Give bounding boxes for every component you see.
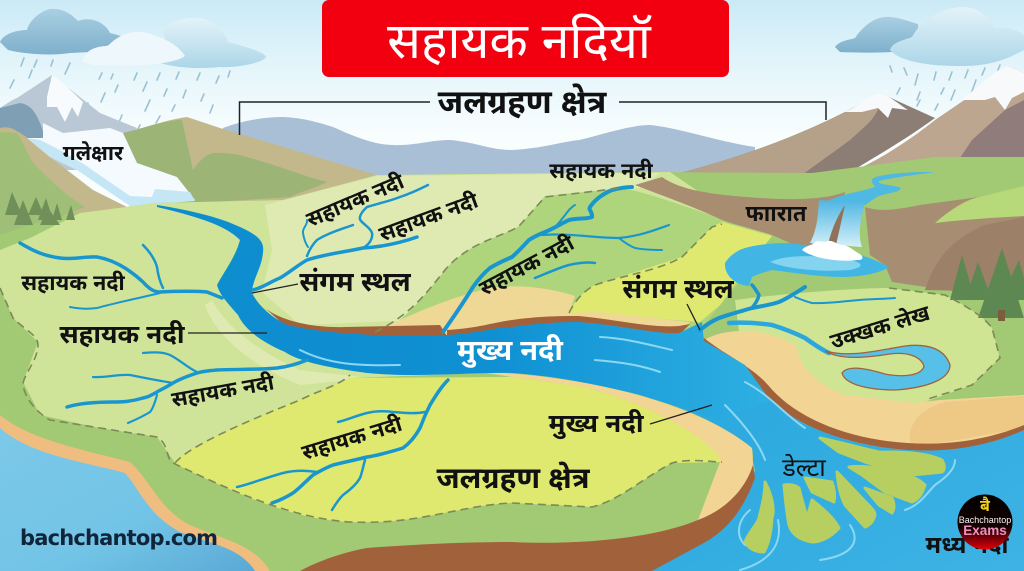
logo: Bachchantop <box>959 515 1011 525</box>
labels: tributaries: सहायक नदी <box>170 369 276 412</box>
logo: बै <box>980 496 991 515</box>
oxbow lake <box>825 345 950 390</box>
yellow-green patch near confluence <box>569 222 772 322</box>
logo: Exams <box>963 523 1007 538</box>
dashed catchment boundaries <box>0 188 1000 522</box>
delta islands <box>745 438 944 552</box>
label: waterfall: फाारात <box>745 201 807 226</box>
sand lower bank <box>480 372 753 520</box>
foam <box>802 241 862 261</box>
label: main river in water: मुख्य नदी <box>457 334 563 368</box>
labels: tributaries: सहायक नदी <box>21 270 125 295</box>
left green hill <box>0 127 133 250</box>
right cloud group <box>835 7 1024 66</box>
right rain <box>890 65 1000 110</box>
trees right <box>950 248 1024 321</box>
right sea and lower river <box>620 330 1024 571</box>
left rain <box>10 58 230 133</box>
label: confluence left: संगम स्थल <box>299 267 412 297</box>
label: main river with leader <box>549 405 712 439</box>
label: delta: डेल्टा <box>781 452 826 482</box>
right mountains <box>680 66 1024 175</box>
right sand bank <box>702 331 1024 451</box>
pale centre land <box>262 173 660 325</box>
lower left sea <box>0 415 270 571</box>
website text: bachchantop.com <box>20 526 218 550</box>
upper right cliff <box>635 177 1024 292</box>
labels: tributaries: सहायक नदी <box>475 230 579 301</box>
label: confluence right <box>622 274 735 330</box>
label: main river with leader: मुख्य नदी <box>549 408 645 439</box>
right tributaries to main river <box>700 285 895 353</box>
labels: tributaries: सहायक नदी <box>299 411 406 465</box>
distant blue hills <box>223 117 755 190</box>
label: tributary with leader: सहायक नदी <box>59 319 186 349</box>
trees left <box>5 192 75 225</box>
logo <box>958 494 1012 550</box>
stream <box>825 172 935 205</box>
brown river bank upper <box>265 308 690 338</box>
central upper catchment tone <box>380 188 772 338</box>
brown bank <box>300 465 755 571</box>
left upper pale catchment <box>0 172 740 463</box>
labels: tributaries: सहायक नदी <box>549 158 653 183</box>
glacier <box>27 123 195 208</box>
label: confluence left <box>252 267 412 297</box>
label: glacier: गलेक्षार <box>63 141 124 165</box>
catchment bracket <box>240 84 826 135</box>
falls <box>810 200 865 247</box>
middle green-tan hill <box>123 117 377 210</box>
label: catchment area: जलग्रहण क्षेत्र <box>436 461 591 495</box>
labels: tributaries: सहायक नदी <box>303 168 408 232</box>
labels: tributaries <box>21 158 934 465</box>
title banner: सहायक नदियॉ <box>387 13 652 69</box>
pale strip beside river <box>205 300 370 385</box>
main river <box>157 205 770 420</box>
labels: tributaries: उक्खक लेख <box>827 300 934 354</box>
left snowy mountain <box>0 75 137 170</box>
labels: tributaries: सहायक नदी <box>376 187 482 246</box>
catchment bracket: जलग्रहण क्षेत्र <box>438 84 608 120</box>
sand bank above main river <box>375 286 690 336</box>
tributaries lower <box>237 380 448 510</box>
base land <box>0 157 1024 571</box>
left cloud group <box>0 9 266 68</box>
label: confluence right: संगम स्थल <box>622 274 735 304</box>
right pale catchment <box>735 288 1000 420</box>
tributaries centre <box>443 187 669 332</box>
label: sea: मध्य नदी <box>926 531 1009 559</box>
delta water highlights <box>300 337 955 570</box>
waterfall pool and stream <box>725 172 935 286</box>
title banner <box>322 0 729 77</box>
tributaries left <box>20 185 428 423</box>
lower catchment <box>173 372 755 571</box>
